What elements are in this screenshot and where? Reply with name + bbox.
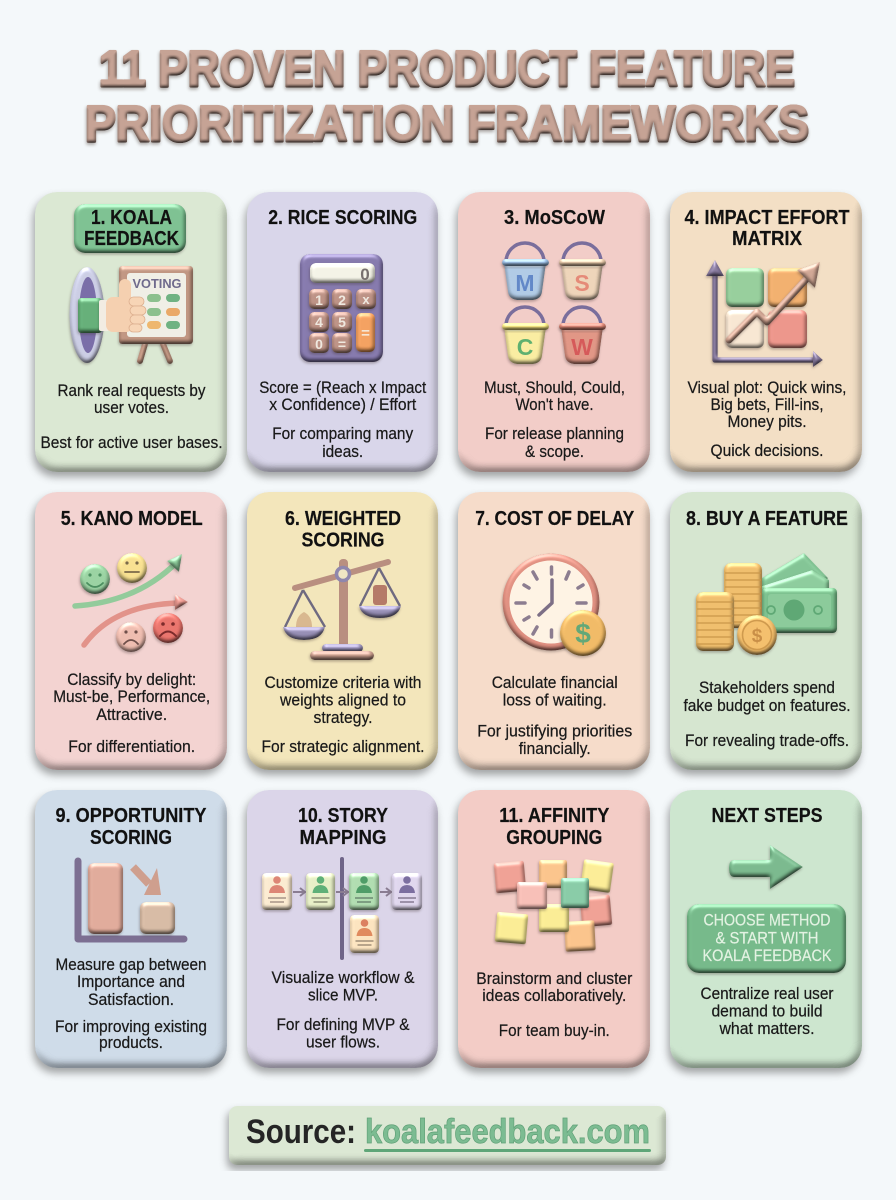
title: 11 PROVEN PRODUCT FEATURE: [99, 41, 795, 97]
icon: clock with dollar coin: [506, 557, 606, 656]
description: Big bets, Fill-ins,: [710, 396, 824, 414]
heading: 10. STORY: [298, 805, 388, 827]
icon: calculator: 4: [315, 314, 323, 330]
description: ideas collaboratively.: [482, 987, 626, 1005]
heading: [298, 805, 388, 849]
icon: right arrow: [729, 845, 803, 889]
icon: sticky notes: [494, 859, 614, 952]
icon: calculator: x: [362, 292, 370, 307]
heading pill: 1. Koala Feedback: [74, 204, 186, 253]
description: Customize criteria with: [264, 674, 422, 692]
description: Attractive.: [96, 706, 167, 724]
heading: MATRIX: [732, 228, 802, 250]
description: Visualize workflow &: [272, 969, 415, 987]
description: Quick decisions.: [710, 442, 824, 460]
icon: four buckets: S: [574, 270, 590, 296]
icon: hand voting on board: [70, 266, 193, 363]
panel: 2. RICE Scoring: [247, 192, 438, 472]
description: Must, Should, Could,: [484, 379, 625, 397]
panel: Next Steps: [670, 790, 862, 1068]
heading: SCORING: [90, 827, 172, 849]
description: [477, 674, 632, 758]
heading: 2. RICE SCORING: [268, 207, 417, 229]
description: & scope.: [525, 443, 584, 461]
description: [688, 379, 846, 460]
icon: four buckets: C: [517, 334, 533, 360]
description: products.: [99, 1034, 163, 1052]
icon: impact effort matrix chart: [706, 260, 823, 367]
description: Best for active user bases.: [40, 434, 222, 452]
heading: NEXT STEPS: [712, 805, 822, 827]
heading: 6. WEIGHTED: [285, 508, 401, 530]
heading: 7. COST OF DELAY: [475, 508, 635, 530]
icon: hand voting on board: VOTING: [132, 277, 182, 291]
description: user votes.: [94, 399, 169, 417]
panel: 1. Koala Feedback: [35, 192, 227, 472]
icon: coins and cash: $: [752, 626, 763, 647]
description: [40, 382, 222, 452]
description: For revealing trade-offs.: [685, 732, 849, 750]
description: demand to build: [712, 1002, 822, 1020]
heading: [285, 508, 401, 552]
icon: four buckets: M: [515, 270, 535, 296]
description: [476, 970, 633, 1040]
title: PRIORITIZATION FRAMEWORKS: [85, 96, 809, 152]
description: user flows.: [306, 1034, 380, 1052]
description: financially.: [519, 740, 591, 758]
icon: opportunity gap bars: [78, 861, 184, 939]
icon: story map cards: [262, 857, 422, 960]
heading: 4. IMPACT EFFORT: [684, 207, 850, 229]
heading: 11. AFFINITY: [499, 805, 610, 827]
description: Visual plot: Quick wins,: [688, 379, 846, 397]
icon: calculator: =: [338, 336, 346, 352]
description: For improving existing: [55, 1018, 207, 1036]
heading pill: 1. Koala Feedback: FEEDBACK: [84, 228, 179, 250]
icon: calculator: 1: [315, 292, 323, 308]
call to action button: CHOOSE METHOD: [704, 912, 830, 930]
icon: kano smileys and curves: [75, 553, 188, 652]
description: Money pits.: [728, 413, 806, 431]
description: For team buy-in.: [499, 1022, 610, 1040]
description: [53, 671, 210, 756]
description: [262, 674, 424, 756]
panel: 8. Buy a Feature: [670, 492, 862, 770]
panel: 5. Kano Model: [35, 492, 227, 770]
heading pill: 1. Koala Feedback: 1. KOALA: [91, 207, 172, 229]
source bar: [229, 1106, 666, 1165]
heading: 8. BUY A FEATURE: [686, 508, 848, 530]
icon: calculator: 0: [360, 265, 370, 284]
icon: calculator: 5: [338, 314, 346, 330]
description: For release planning: [485, 425, 624, 443]
description: [484, 379, 625, 461]
panel: 9. Opportunity Scoring: [35, 790, 227, 1068]
icon: balance scale: [283, 559, 401, 660]
panel: 6. Weighted Scoring: [247, 492, 438, 770]
heading: MAPPING: [300, 827, 386, 849]
description: For comparing many: [272, 425, 414, 443]
icon: calculator: 2: [338, 292, 346, 308]
source bar: Source:: [246, 1113, 356, 1151]
icon: calculator: [300, 254, 383, 362]
heading: SCORING: [302, 530, 384, 552]
description: x Confidence) / Effort: [269, 396, 417, 414]
heading: 5. KANO MODEL: [61, 508, 203, 530]
description: loss of waiting.: [503, 692, 607, 710]
description: For differentiation.: [68, 738, 195, 756]
icon: calculator: =: [361, 325, 370, 342]
panel: 4. Impact Effort Matrix: [670, 192, 862, 472]
description: Won't have.: [516, 396, 594, 414]
heading: 9. OPPORTUNITY: [56, 805, 207, 827]
description: For justifying priorities: [477, 722, 632, 740]
icon: coins and cash: [696, 553, 837, 655]
source bar: koalafeedback.com: [365, 1113, 650, 1151]
description: [684, 679, 850, 750]
panel: 3. MoSCoW: [458, 192, 650, 472]
description: Classify by delight:: [67, 671, 196, 689]
heading: [499, 805, 610, 849]
description: For strategic alignment.: [262, 738, 424, 756]
description: strategy.: [314, 709, 372, 727]
description: Rank real requests by: [58, 382, 206, 400]
call to action button: [687, 904, 846, 973]
description: [700, 985, 834, 1038]
description: Stakeholders spend: [699, 679, 835, 697]
panel: 7. Cost of Delay: [458, 492, 650, 770]
description: weights aligned to: [279, 692, 406, 710]
description: [259, 379, 427, 461]
title: [85, 41, 809, 152]
description: Calculate financial: [492, 674, 618, 692]
heading: GROUPING: [506, 827, 602, 849]
description: Must-be, Performance,: [53, 688, 210, 706]
heading: 3. MoSCoW: [504, 207, 606, 229]
panel: 11. Affinity Grouping: [458, 790, 650, 1068]
description: [272, 969, 415, 1052]
heading: [56, 805, 207, 849]
icon: four buckets: [502, 243, 606, 364]
description: Importance and: [77, 973, 185, 991]
description: Brainstorm and cluster: [476, 970, 633, 988]
icon: calculator: 0: [315, 336, 323, 352]
description: Centralize real user: [700, 985, 834, 1003]
description: Score = (Reach x Impact: [259, 379, 427, 397]
description: [55, 956, 207, 1052]
description: Satisfaction.: [88, 991, 174, 1009]
description: ideas.: [322, 443, 363, 461]
description: what matters.: [719, 1020, 814, 1038]
heading: [684, 207, 850, 250]
description: slice MVP.: [308, 986, 378, 1004]
description: Measure gap between: [56, 956, 206, 974]
call to action button: KOALA FEEDBACK: [702, 947, 832, 965]
icon: clock with dollar coin: $: [575, 618, 591, 649]
icon: four buckets: W: [571, 334, 593, 360]
panel: 10. Story Mapping: [247, 790, 438, 1068]
description: For defining MVP &: [276, 1016, 410, 1034]
description: fake budget on features.: [684, 697, 850, 715]
call to action button: & START WITH: [716, 930, 818, 948]
